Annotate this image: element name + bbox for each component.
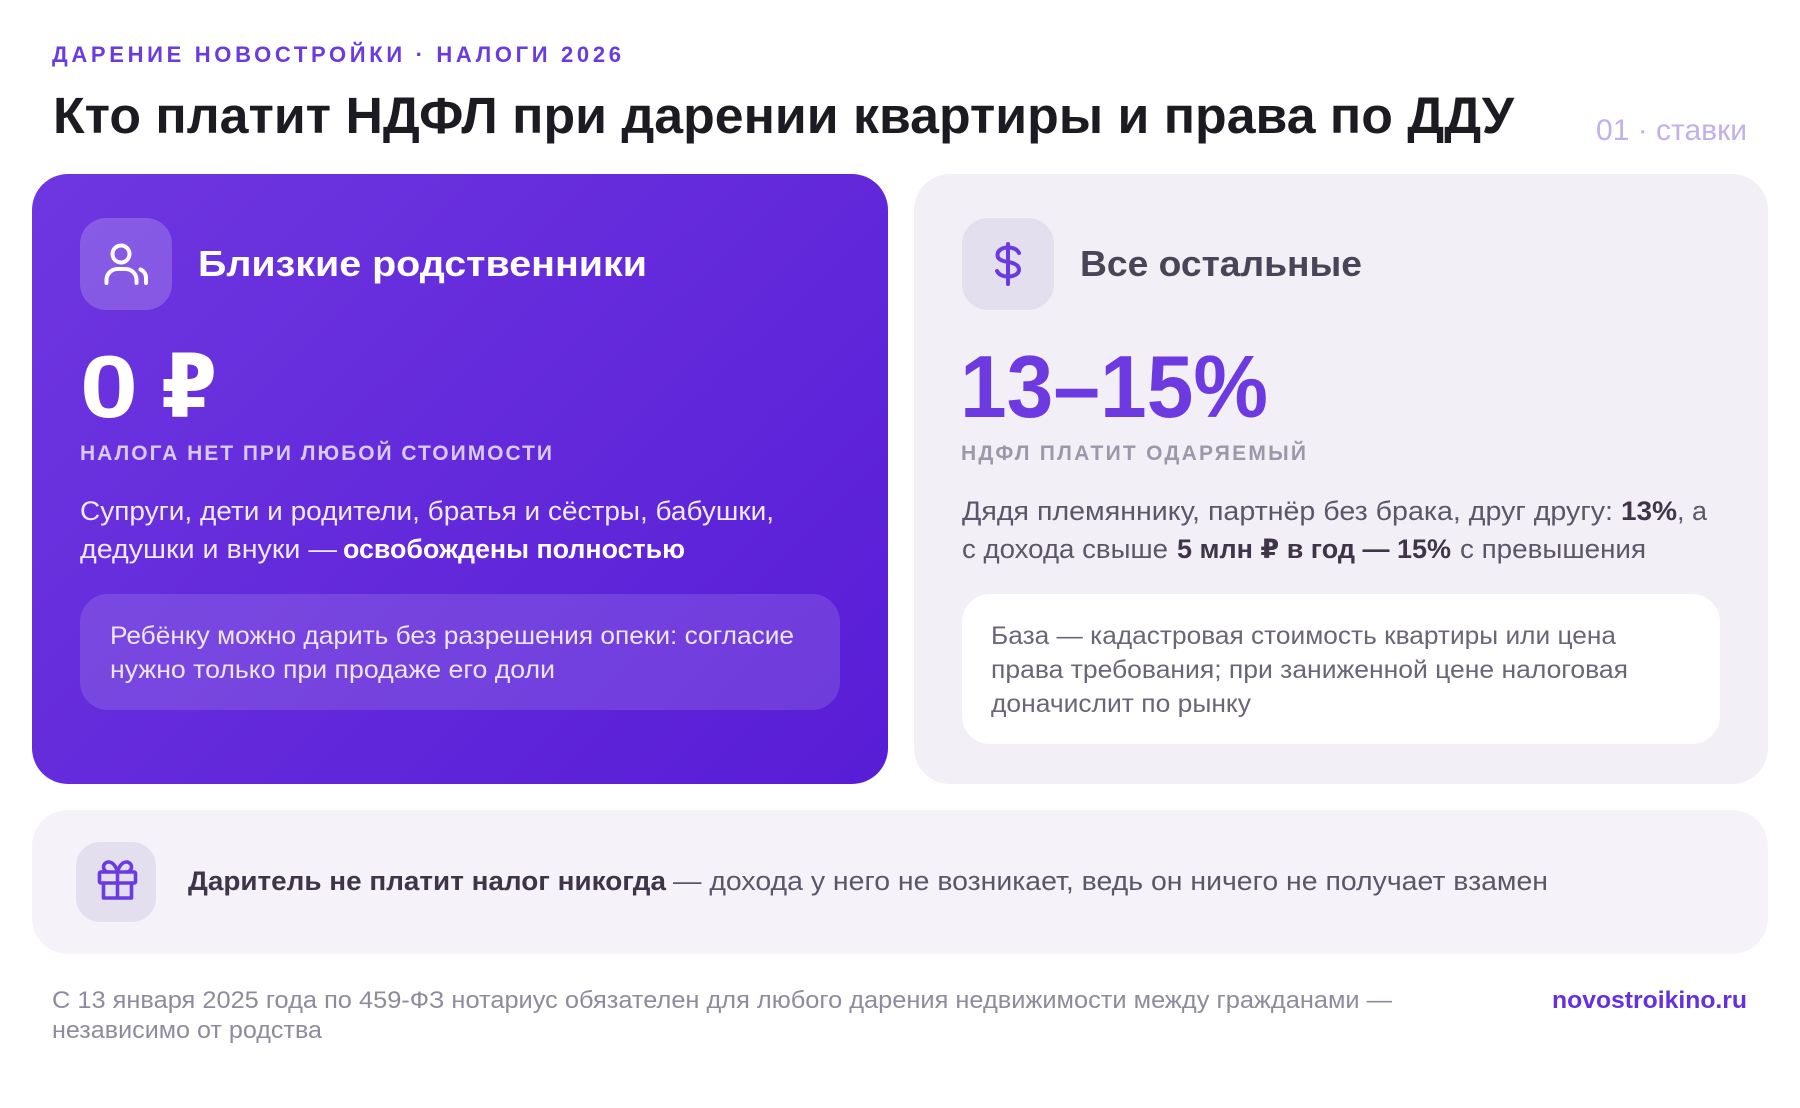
- eyebrow: ДАРЕНИЕ НОВОСТРОЙКИ · НАЛОГИ 2026: [52, 42, 621, 67]
- panel: everyone else: [914, 174, 1768, 784]
- big value: 0: [80, 337, 138, 436]
- note box: доначислит по рынку: [991, 690, 1252, 718]
- footnote: С 13 января 2025 года по 459-ФЗ нотариус обязателен для любого дарения недвижимости между гражданами —: [52, 987, 1392, 1014]
- note box: [80, 594, 840, 710]
- description: дедушки и внуки —: [80, 534, 338, 564]
- icon: dollar: [962, 218, 1054, 310]
- note box: права требования; при заниженной цене налоговая: [991, 656, 1628, 684]
- description: освобождены полностью: [343, 534, 685, 564]
- heading: Близкие родственники: [198, 243, 647, 284]
- panel background: [32, 810, 1768, 954]
- description: Дядя племяннику, партнёр без брака, друг другу:: [962, 496, 1613, 526]
- icon: gift: [76, 842, 156, 922]
- value caption: НДФЛ ПЛАТИТ ОДАРЯЕМЫЙ: [961, 441, 1306, 465]
- description: Супруги, дети и родители, братья и сёстры, бабушки,: [80, 496, 774, 526]
- big value: [80, 337, 217, 436]
- donor statement: — дохода у него не возникает, ведь он ничего не получает взамен: [673, 866, 1548, 896]
- donor statement: [188, 866, 1548, 896]
- note box: [962, 594, 1720, 744]
- description: [80, 496, 774, 564]
- page marker: 01 · ставки: [1596, 114, 1747, 147]
- footnote: независимо от родства: [52, 1017, 323, 1044]
- big value: ₽: [161, 337, 217, 436]
- description: , а: [1677, 496, 1707, 526]
- description: с дохода свыше: [962, 534, 1168, 564]
- note box: База — кадастровая стоимость квартиры или цена: [991, 622, 1616, 650]
- note box: Ребёнку можно дарить без разрешения опеки: согласие: [110, 622, 794, 650]
- panel: donor note: [32, 810, 1768, 954]
- value caption: НАЛОГА НЕТ ПРИ ЛЮБОЙ СТОИМОСТИ: [80, 441, 552, 465]
- note box: нужно только при продаже его доли: [110, 656, 555, 684]
- heading: Все остальные: [1080, 243, 1362, 284]
- description: [962, 496, 1707, 564]
- panel background: [32, 174, 888, 784]
- panel background: [914, 174, 1768, 784]
- donor statement: Даритель не платит налог никогда: [188, 866, 666, 896]
- title: Кто платит НДФЛ при дарении квартиры и права по ДДУ: [53, 87, 1515, 144]
- description: 13%: [1621, 496, 1677, 526]
- description: с превышения: [1460, 534, 1646, 564]
- panel: close relatives: [32, 174, 888, 784]
- footnote: [52, 987, 1392, 1044]
- description: 5 млн ₽ в год — 15%: [1177, 534, 1451, 564]
- brand: novostroikino.ru: [1552, 987, 1747, 1014]
- big value: 13–15%: [960, 337, 1268, 436]
- icon: person: [80, 218, 172, 310]
